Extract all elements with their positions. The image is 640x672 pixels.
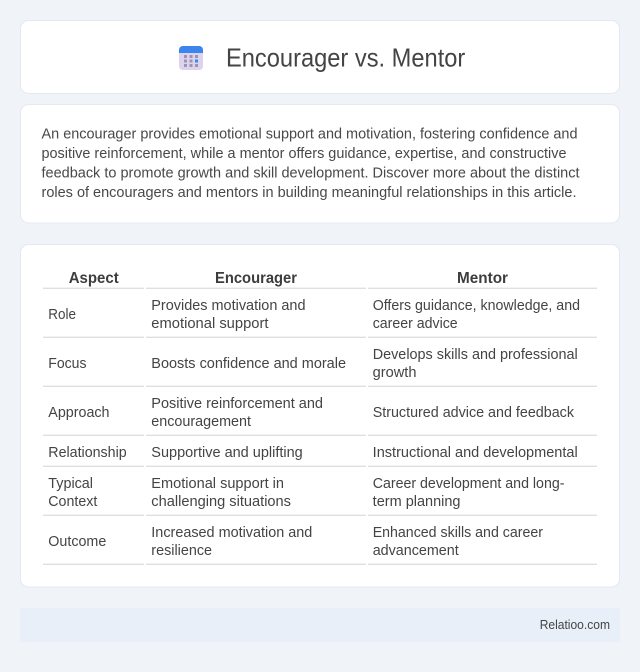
panel: title card <box>20 20 620 94</box>
table header: Aspect <box>69 270 119 287</box>
title: Encourager vs. Mentor <box>226 45 466 73</box>
footer <box>20 608 620 642</box>
row: approach: encouragement <box>151 414 251 430</box>
row: outcome: advancement <box>373 543 459 559</box>
row: typical context: Context <box>48 494 97 510</box>
row: relationship: Instructional and developmental <box>373 445 578 461</box>
row: outcome: Increased motivation and <box>151 525 312 541</box>
table header: Encourager <box>215 270 297 287</box>
row: focus: growth <box>373 365 416 381</box>
row: relationship: Relationship <box>48 445 127 461</box>
row: typical context: Emotional support in <box>151 476 284 492</box>
row: relationship <box>48 445 578 461</box>
row: approach: Positive reinforcement and <box>151 396 323 412</box>
row: focus: Focus <box>48 356 86 372</box>
row: role: emotional support <box>151 316 268 332</box>
row: focus <box>48 347 578 381</box>
table header: Mentor <box>457 270 508 287</box>
text block: description: An encourager provides emotional support and motivation, fostering confidence and <box>42 127 578 143</box>
row: outcome: Outcome <box>48 534 106 550</box>
row: typical context: term planning <box>373 494 460 510</box>
row: typical context <box>48 476 565 510</box>
row: typical context: Career development and long- <box>373 476 565 492</box>
row: focus: Boosts confidence and morale <box>151 356 346 372</box>
text block: description <box>42 127 580 201</box>
text block: description: feedback to promote growth and skill development. Discover more about the distinct <box>42 166 580 182</box>
row: approach: Approach <box>48 405 110 421</box>
row: outcome: resilience <box>151 543 212 559</box>
text block: description: positive reinforcement, while a mentor offers guidance, expertise, and constructive <box>42 146 566 162</box>
row: outcome <box>48 525 543 559</box>
row: role: career advice <box>373 316 458 332</box>
row: role: Provides motivation and <box>151 298 306 314</box>
row: focus: Develops skills and professional <box>373 347 578 363</box>
row: outcome: Enhanced skills and career <box>373 525 543 541</box>
text block: description: roles of encouragers and mentors in building meaningful relationships in this article. <box>42 185 576 201</box>
row: typical context: Typical <box>48 476 93 492</box>
row: role: Role <box>48 307 76 323</box>
row: approach <box>48 396 575 430</box>
panel: description card <box>20 104 620 223</box>
row: role <box>48 298 580 332</box>
row: role: Offers guidance, knowledge, and <box>373 298 580 314</box>
row: typical context: challenging situations <box>151 494 291 510</box>
row: relationship: Supportive and uplifting <box>151 445 303 461</box>
table header <box>69 270 508 287</box>
row: approach: Structured advice and feedback <box>373 405 575 421</box>
icon: calendar <box>179 46 203 70</box>
panel: comparison table card <box>20 244 620 587</box>
footer credit: Relatioo.com <box>540 617 610 632</box>
